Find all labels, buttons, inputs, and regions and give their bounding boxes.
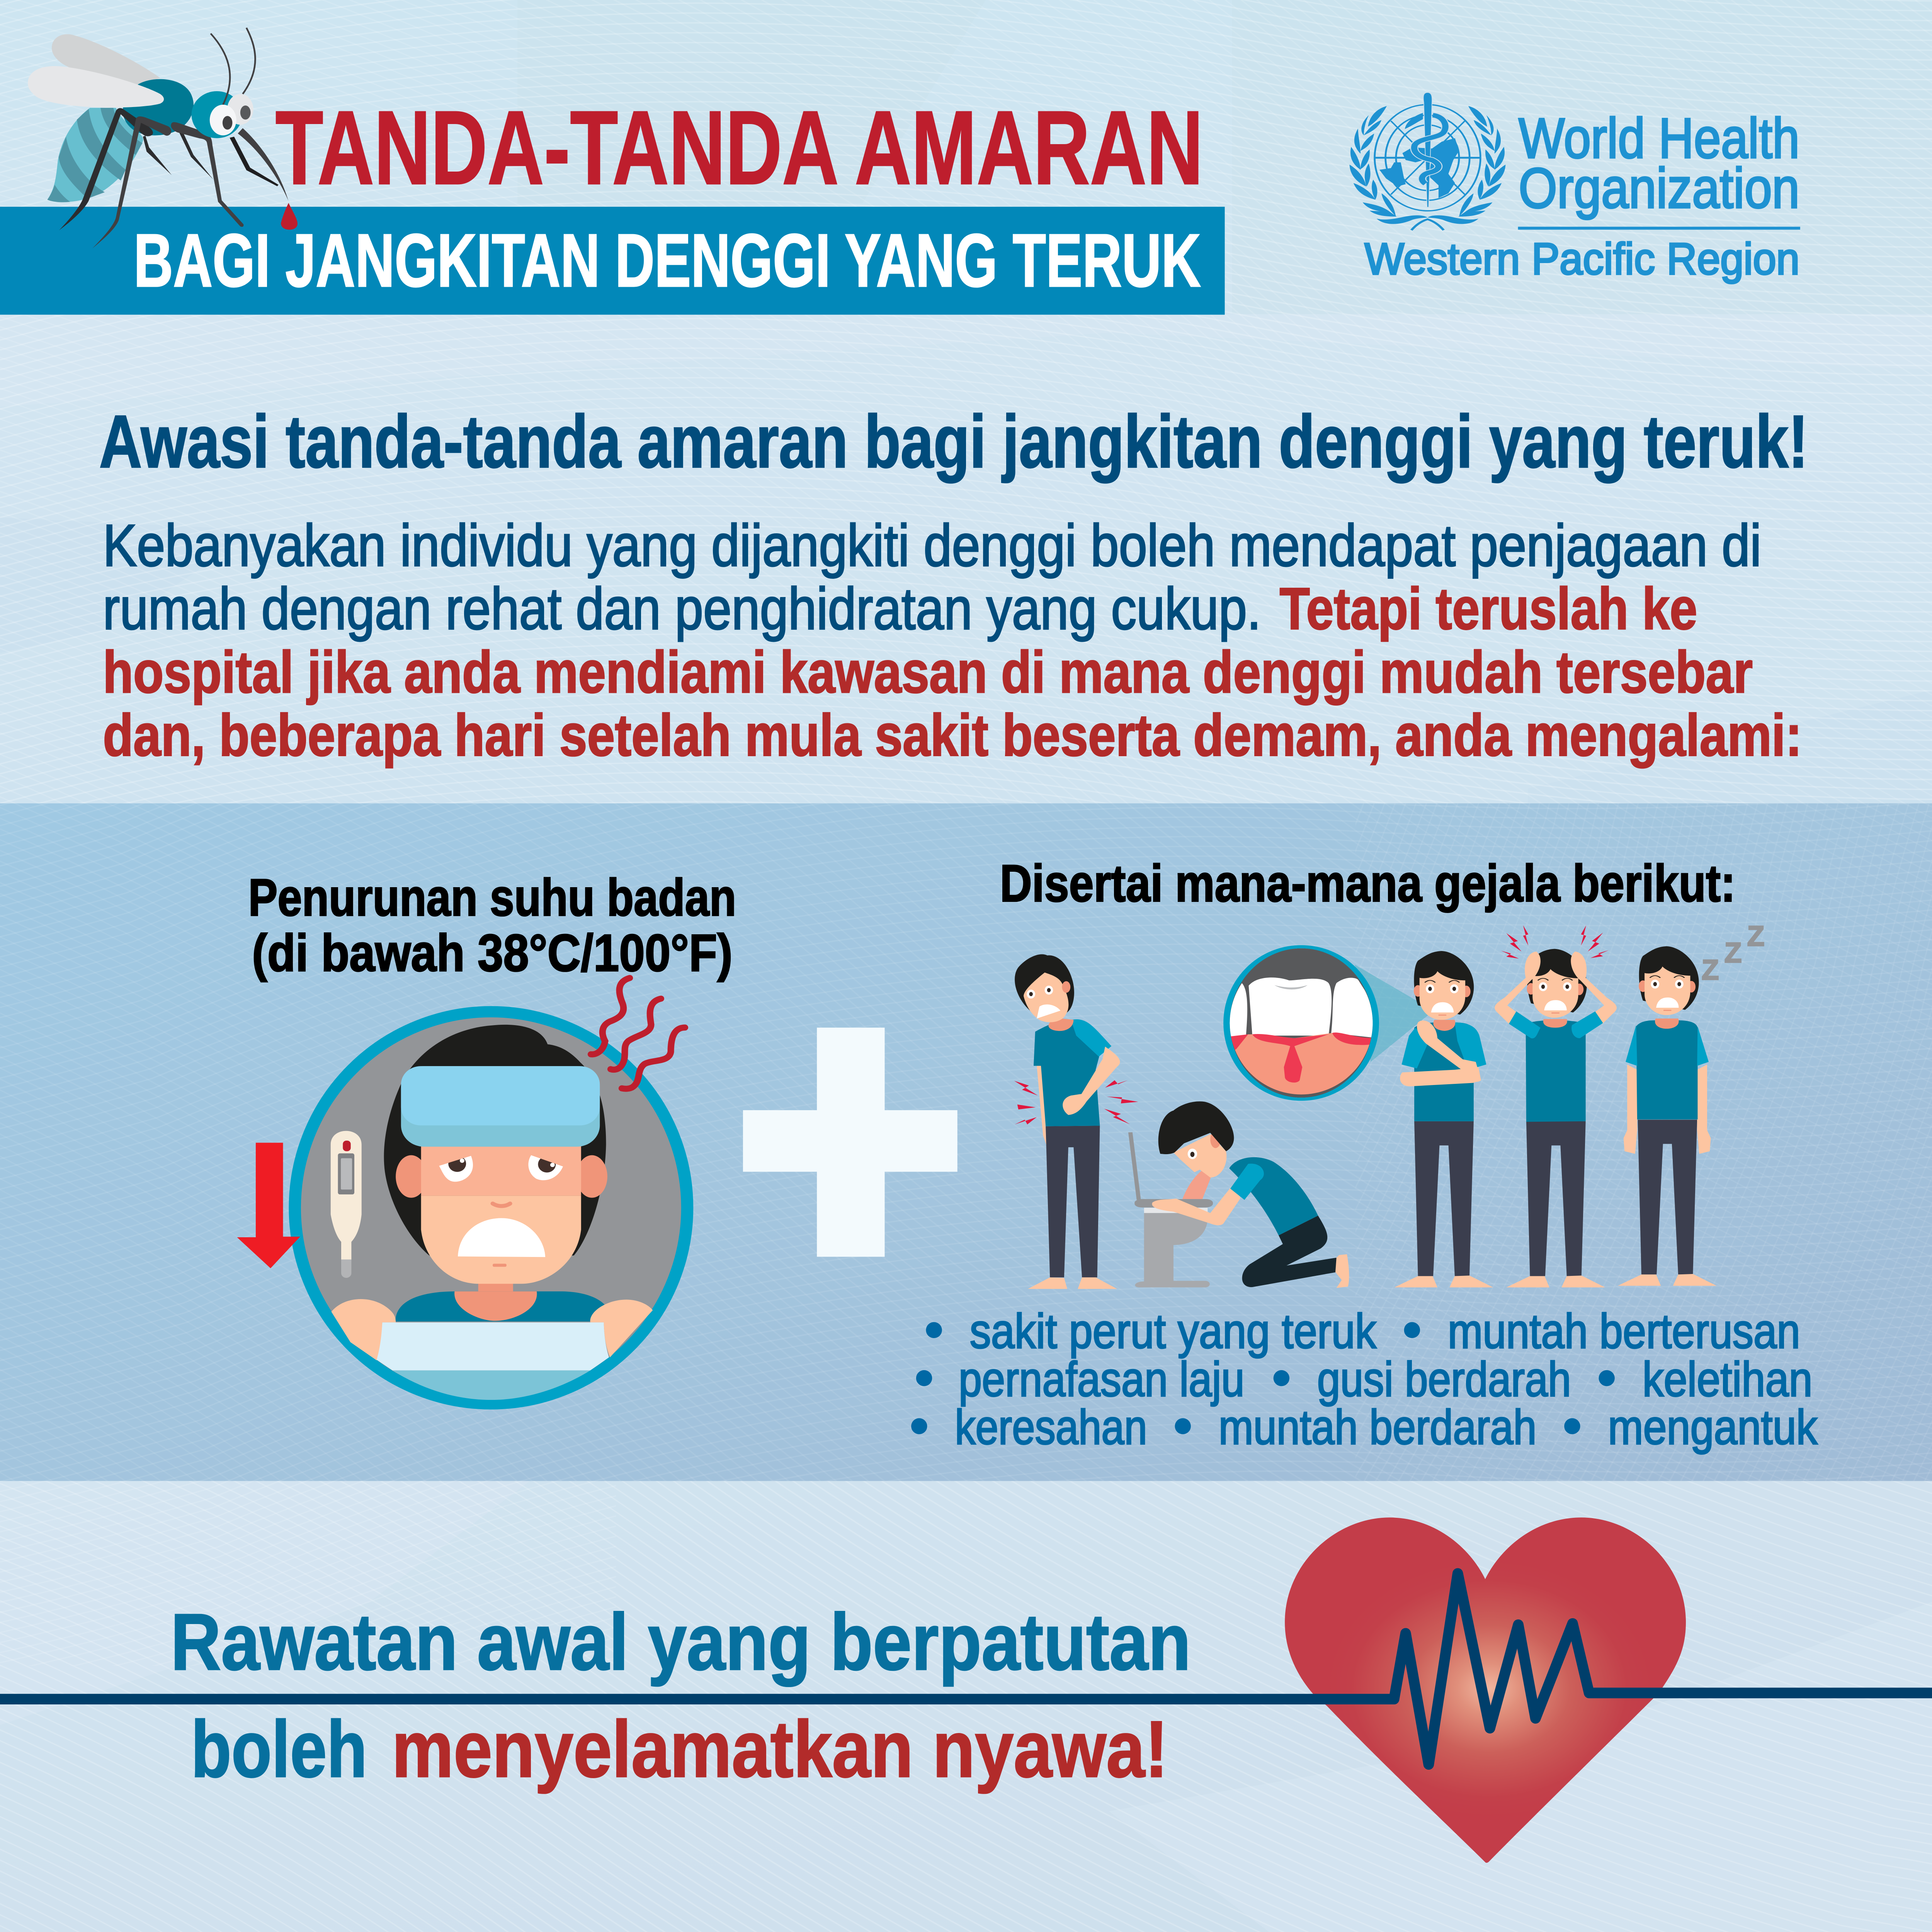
- closing message: boleh: [191, 1704, 367, 1794]
- row 1: sakit perut yang teruk: [970, 1304, 1377, 1359]
- icon: mosquito: [28, 28, 298, 248]
- heading: lowered body temperature: (di bawah 38°C/100°F): [252, 923, 733, 982]
- staff: [1423, 93, 1432, 207]
- row 3: keresahan: [955, 1400, 1147, 1454]
- serpent: [1405, 113, 1446, 184]
- icon: thermometer: [331, 1131, 362, 1278]
- arrow: temperature down: [237, 1143, 300, 1268]
- ribbon ties: [1412, 219, 1444, 230]
- heading: lowered body temperature: [248, 868, 736, 982]
- figure: rapid breathing with bleeding gums: [1394, 951, 1493, 1287]
- laurel left: [1350, 106, 1427, 224]
- intro paragraph: [103, 512, 1802, 768]
- abdomen: [47, 108, 143, 202]
- portrait circle: [295, 1012, 687, 1404]
- rear wing: [52, 34, 160, 85]
- icon: sleep letters: [1702, 920, 1764, 986]
- closing message: menyelamatkan nyawa!: [392, 1704, 1168, 1794]
- icon: sleep letters: Z: [1725, 937, 1742, 968]
- row 1: [926, 1304, 1800, 1359]
- intro paragraph: Tetapi teruslah ke: [1280, 576, 1697, 642]
- row 1: muntah berterusan: [1448, 1304, 1800, 1359]
- row 2: pernafasan laju: [959, 1352, 1245, 1406]
- figure: persistent vomiting at toilet: [1130, 1101, 1349, 1288]
- logo: organisation name: [1365, 107, 1800, 284]
- continents: [1379, 138, 1459, 198]
- background: top section: [0, 0, 1932, 803]
- figure: severe abdominal pain: [1005, 954, 1138, 1289]
- illustration: symptom figures: [1005, 925, 1716, 1289]
- illustration: feverish person with thermometer: [237, 978, 687, 1404]
- figure: lethargy: [1618, 946, 1716, 1286]
- closing message: Rawatan awal yang berpatutan: [171, 1597, 1191, 1687]
- person: [331, 1025, 653, 1400]
- figure: restlessness with hands on head: [1495, 925, 1617, 1287]
- row 2: keletihan: [1643, 1352, 1813, 1406]
- front wing: [28, 66, 164, 107]
- closing message: [171, 1597, 1191, 1794]
- heading: lowered body temperature: Penurunan suhu badan: [248, 868, 736, 927]
- thorax: [123, 79, 194, 135]
- icon: plus sign: [743, 1027, 957, 1257]
- proboscis: [238, 128, 288, 201]
- intro paragraph: rumah dengan rehat dan penghidratan yang cukup.: [103, 576, 1261, 642]
- background: bottom section: [0, 1481, 1932, 1932]
- row 3: [911, 1400, 1818, 1454]
- heading: accompanying symptoms: Disertai mana-mana gejala berikut:: [1000, 854, 1735, 913]
- callout: bleeding gums: [1226, 947, 1434, 1099]
- globe grid: [1375, 105, 1480, 211]
- heartbeat line: [0, 1573, 1932, 1764]
- legs: [59, 108, 279, 248]
- laurel right: [1427, 106, 1505, 224]
- logo: WHO emblem: [1350, 93, 1505, 230]
- icon: sleep letters: Z: [1702, 954, 1719, 986]
- row 2: gusi berdarah: [1317, 1352, 1571, 1406]
- title: main heading: TANDA-TANDA AMARAN: [276, 90, 1203, 206]
- symptom list: [911, 1304, 1818, 1454]
- icon: heat waves: [591, 978, 685, 1089]
- blood drop: [281, 203, 298, 230]
- row 3: mengantuk: [1608, 1400, 1818, 1454]
- title banner: [0, 207, 1225, 315]
- head and eyes: [192, 28, 255, 138]
- icon: sleep letters: Z: [1747, 920, 1764, 952]
- title: sub heading: BAGI JANGKITAN DENGGI YANG TERUK: [134, 219, 1201, 303]
- icon: heart: [1285, 1517, 1686, 1863]
- row 3: muntah berdarah: [1219, 1400, 1536, 1454]
- row 2: [916, 1352, 1813, 1406]
- background: symptoms band: [0, 803, 1932, 1481]
- logo: organisation name: World Health: [1519, 107, 1799, 170]
- logo: organisation name: Western Pacific Region: [1365, 235, 1799, 284]
- logo: organisation name: Organization: [1519, 156, 1799, 220]
